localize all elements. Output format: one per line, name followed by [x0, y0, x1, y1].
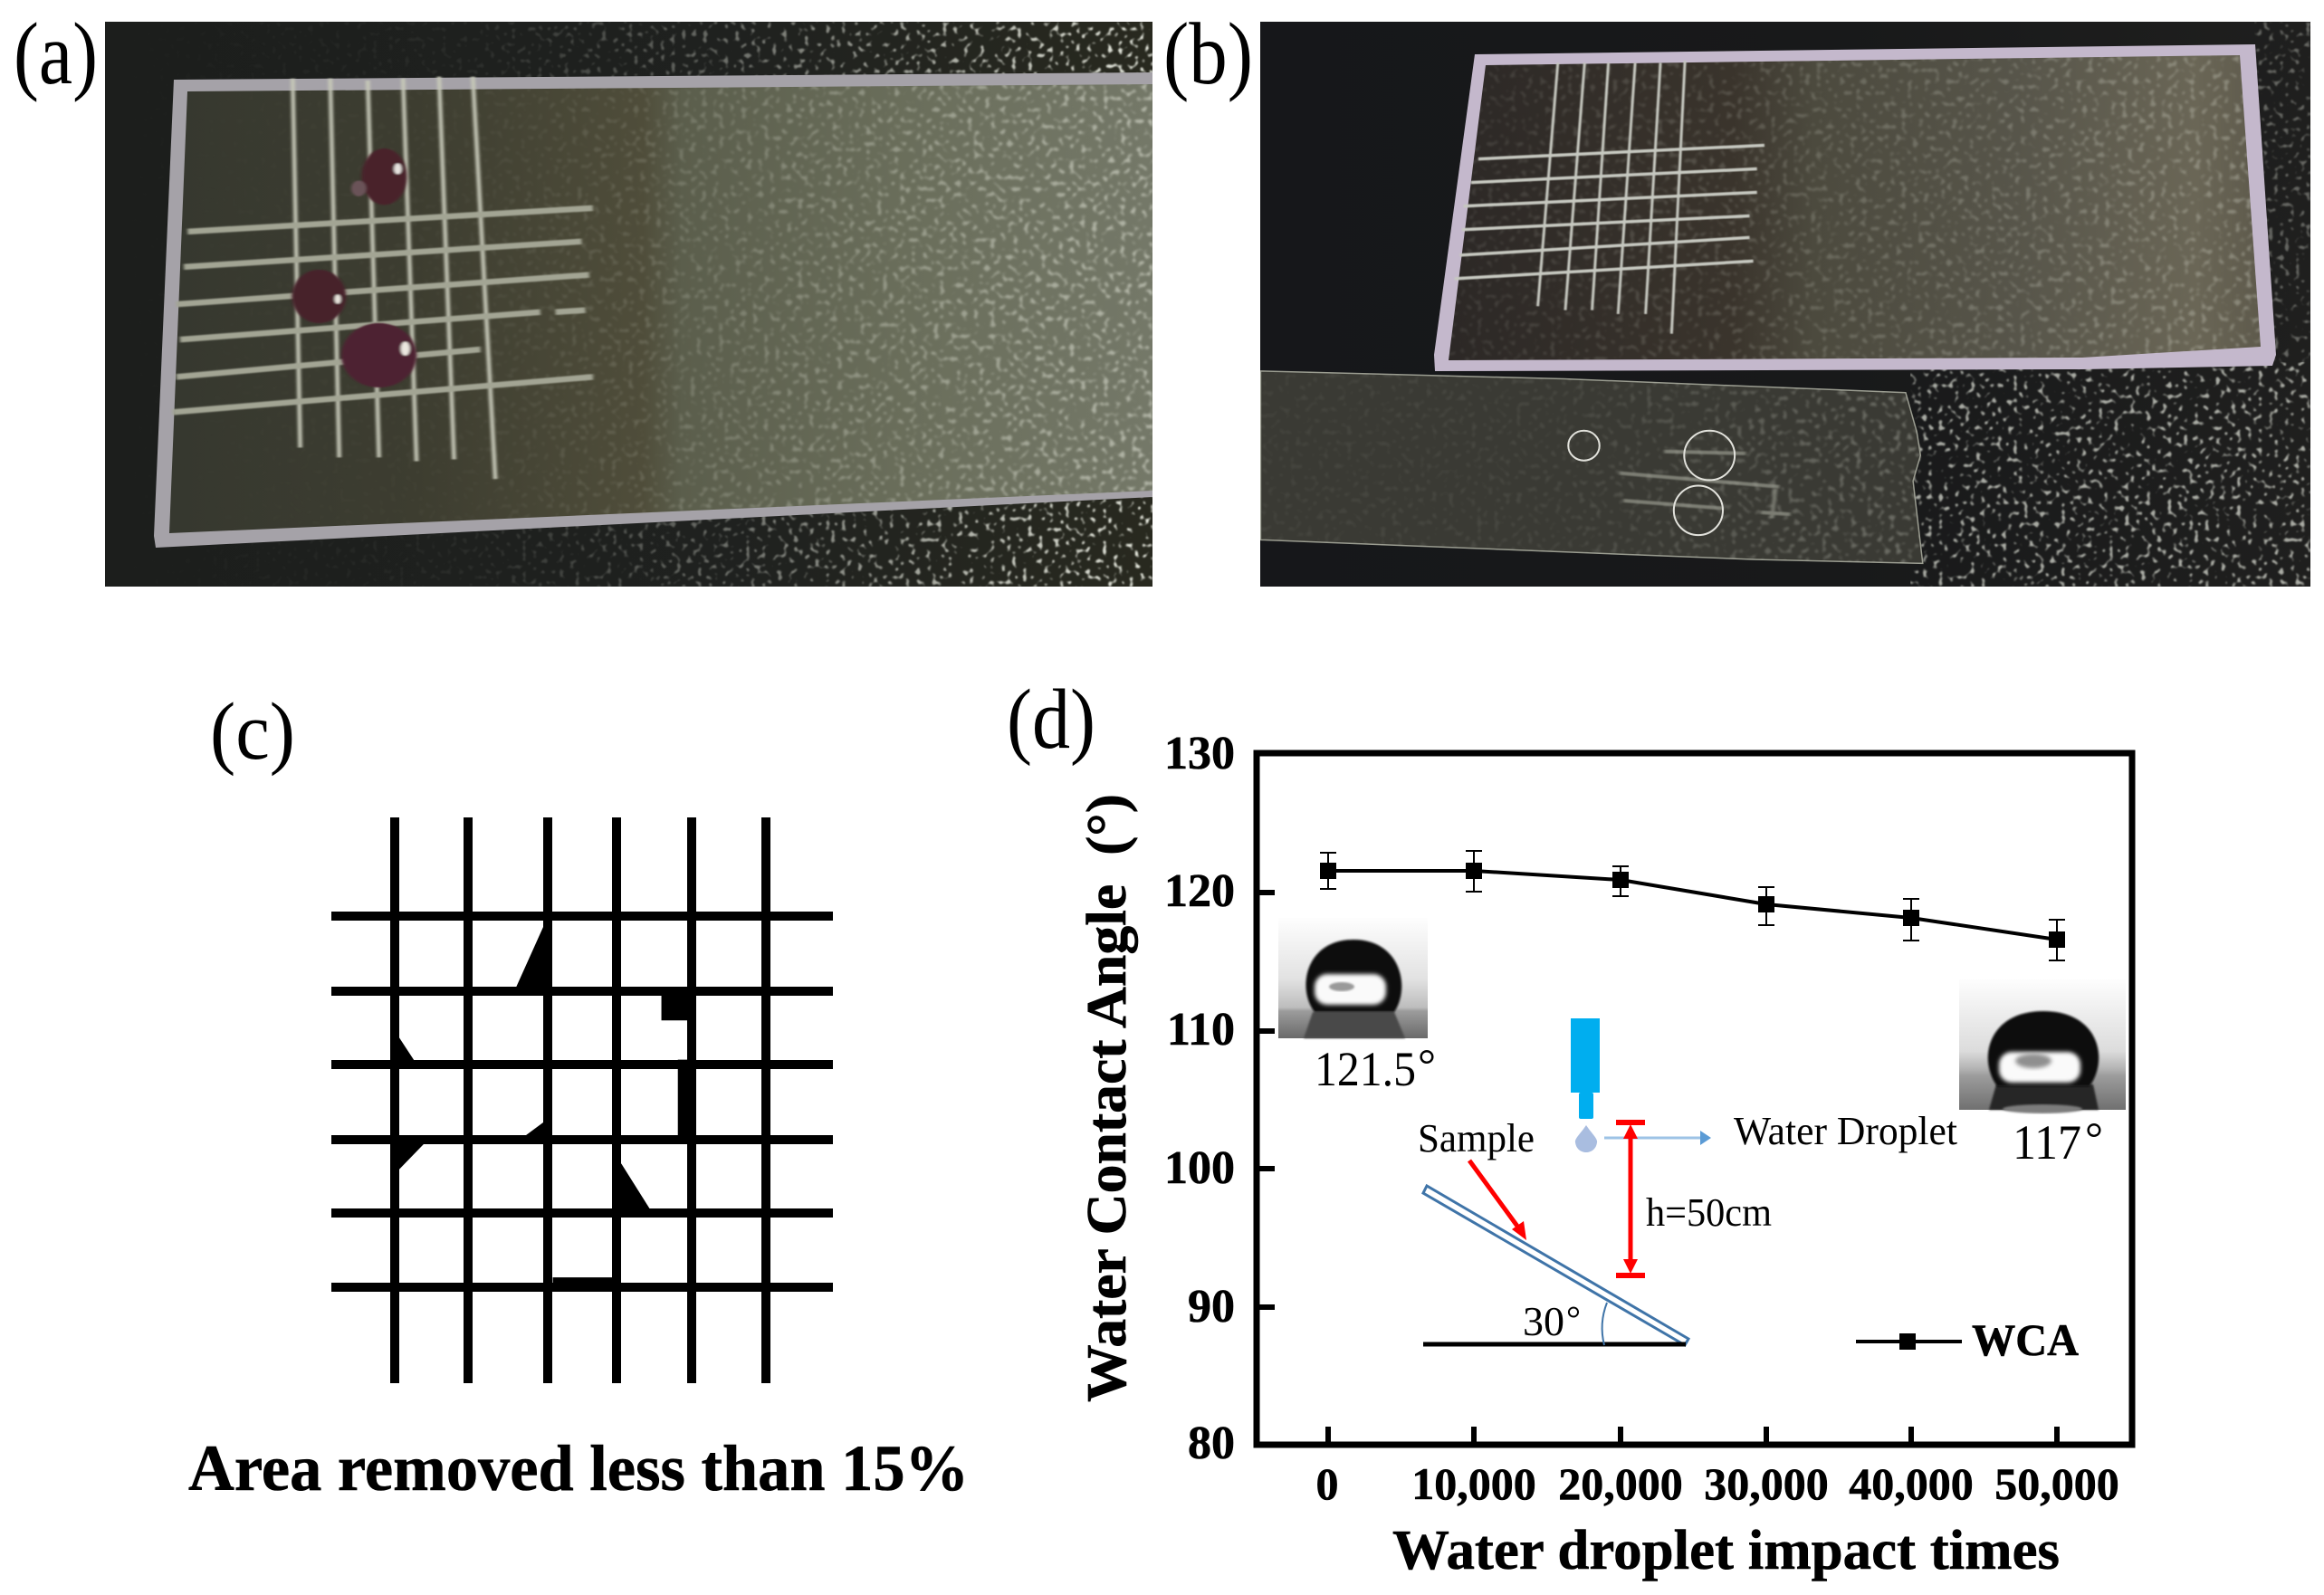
y axis tick labels: 90 — [1188, 1281, 1235, 1332]
panel c: cross-cut grid schematic — [188, 687, 969, 1504]
label a: (a) — [14, 5, 98, 103]
photo background: dark leather surface — [105, 22, 1152, 587]
leather texture lower right — [1910, 362, 2310, 587]
x axis tick labels: 20,000 — [1558, 1458, 1683, 1509]
angle arc — [1602, 1303, 1607, 1345]
y axis tick labels: 100 — [1164, 1142, 1235, 1194]
debris streaks and highlight circles — [1568, 431, 1791, 535]
transferred debris streaks — [1620, 452, 1791, 518]
leather texture — [353, 22, 1152, 587]
y axis tick labels: 120 — [1164, 865, 1235, 917]
removed area fragments — [395, 924, 694, 1288]
panel b: glass slide and peeled tape photo — [1260, 22, 2310, 587]
axis ticks — [1258, 893, 2057, 1445]
water drops — [292, 148, 416, 387]
label c: (c) — [210, 687, 295, 777]
y axis tick labels — [1164, 728, 1235, 1469]
legend: WCA — [1972, 1314, 2079, 1365]
x axis tick labels: 30,000 — [1704, 1458, 1829, 1509]
angle degree sign: ° — [1566, 1298, 1581, 1339]
adhesive tape strip — [1260, 371, 1923, 563]
glass slide surface — [169, 84, 1152, 533]
degree sign left: ° — [1418, 1039, 1436, 1090]
glass slide surface — [1449, 55, 2261, 360]
angle label 117: 117 — [2013, 1115, 2081, 1170]
x axis tick labels: 0 — [1316, 1458, 1338, 1509]
water droplet — [1575, 1125, 1597, 1152]
markers — [1320, 863, 2065, 948]
coating texture on slide — [500, 84, 1152, 518]
connecting line — [1328, 871, 2057, 940]
chart frame — [1257, 753, 2132, 1445]
inset: droplet at 121.5 degrees — [1278, 918, 1428, 1038]
panel a: glass slide photo with water drops — [105, 22, 1152, 587]
glass slide edge — [1434, 44, 2276, 371]
y axis tick labels: 110 — [1167, 1004, 1235, 1055]
impact test schematic — [1418, 1018, 1957, 1345]
inset: droplet at 117 degrees — [1959, 979, 2126, 1113]
x axis title: Water droplet impact times — [1392, 1520, 2060, 1581]
leather texture right strip — [2254, 22, 2310, 366]
data series WCA — [1320, 851, 2065, 960]
caption: Area removed less than 15% — [188, 1432, 969, 1504]
x axis tick labels: 10,000 — [1411, 1458, 1536, 1509]
angle label 121.5: 121.5 — [1315, 1042, 1416, 1096]
angle label: 30 — [1523, 1298, 1564, 1344]
droplet pointer arrow — [1604, 1131, 1711, 1145]
error bars — [1320, 851, 2065, 960]
label d: (d) — [1007, 673, 1095, 767]
coating texture on slide — [1449, 54, 2263, 362]
x axis tick labels — [1316, 1458, 2119, 1509]
height dimension arrow — [1616, 1122, 1645, 1275]
cross-hatch scratches — [1455, 61, 1765, 334]
grid lines — [331, 817, 833, 1383]
x axis tick labels: 40,000 — [1849, 1458, 1974, 1509]
y axis title: Water Contact Angle (°) — [1076, 794, 1138, 1402]
base line — [1423, 1342, 1686, 1347]
glass slide edge — [154, 72, 1152, 548]
height label: h=50cm — [1646, 1190, 1772, 1235]
tilted sample — [1423, 1186, 1688, 1345]
legend — [1856, 1314, 2079, 1365]
Water Droplet label: Water Droplet — [1734, 1109, 1957, 1153]
y axis tick labels: 80 — [1188, 1418, 1235, 1469]
x axis tick labels: 50,000 — [1994, 1458, 2119, 1509]
tape body — [1260, 371, 1923, 563]
sample pointer arrow — [1469, 1160, 1526, 1240]
highlight circles — [1568, 431, 1735, 535]
degree sign right: ° — [2085, 1113, 2103, 1163]
tape surface texture — [1260, 371, 1930, 566]
nozzle — [1571, 1018, 1600, 1119]
label b: (b) — [1163, 5, 1253, 103]
y axis tick labels: 130 — [1164, 728, 1235, 779]
cross-hatch scratches — [173, 77, 593, 479]
panel d: water contact angle chart — [1007, 673, 2132, 1581]
photo background: dark surface — [1260, 22, 2310, 587]
Sample label: Sample — [1418, 1116, 1535, 1160]
